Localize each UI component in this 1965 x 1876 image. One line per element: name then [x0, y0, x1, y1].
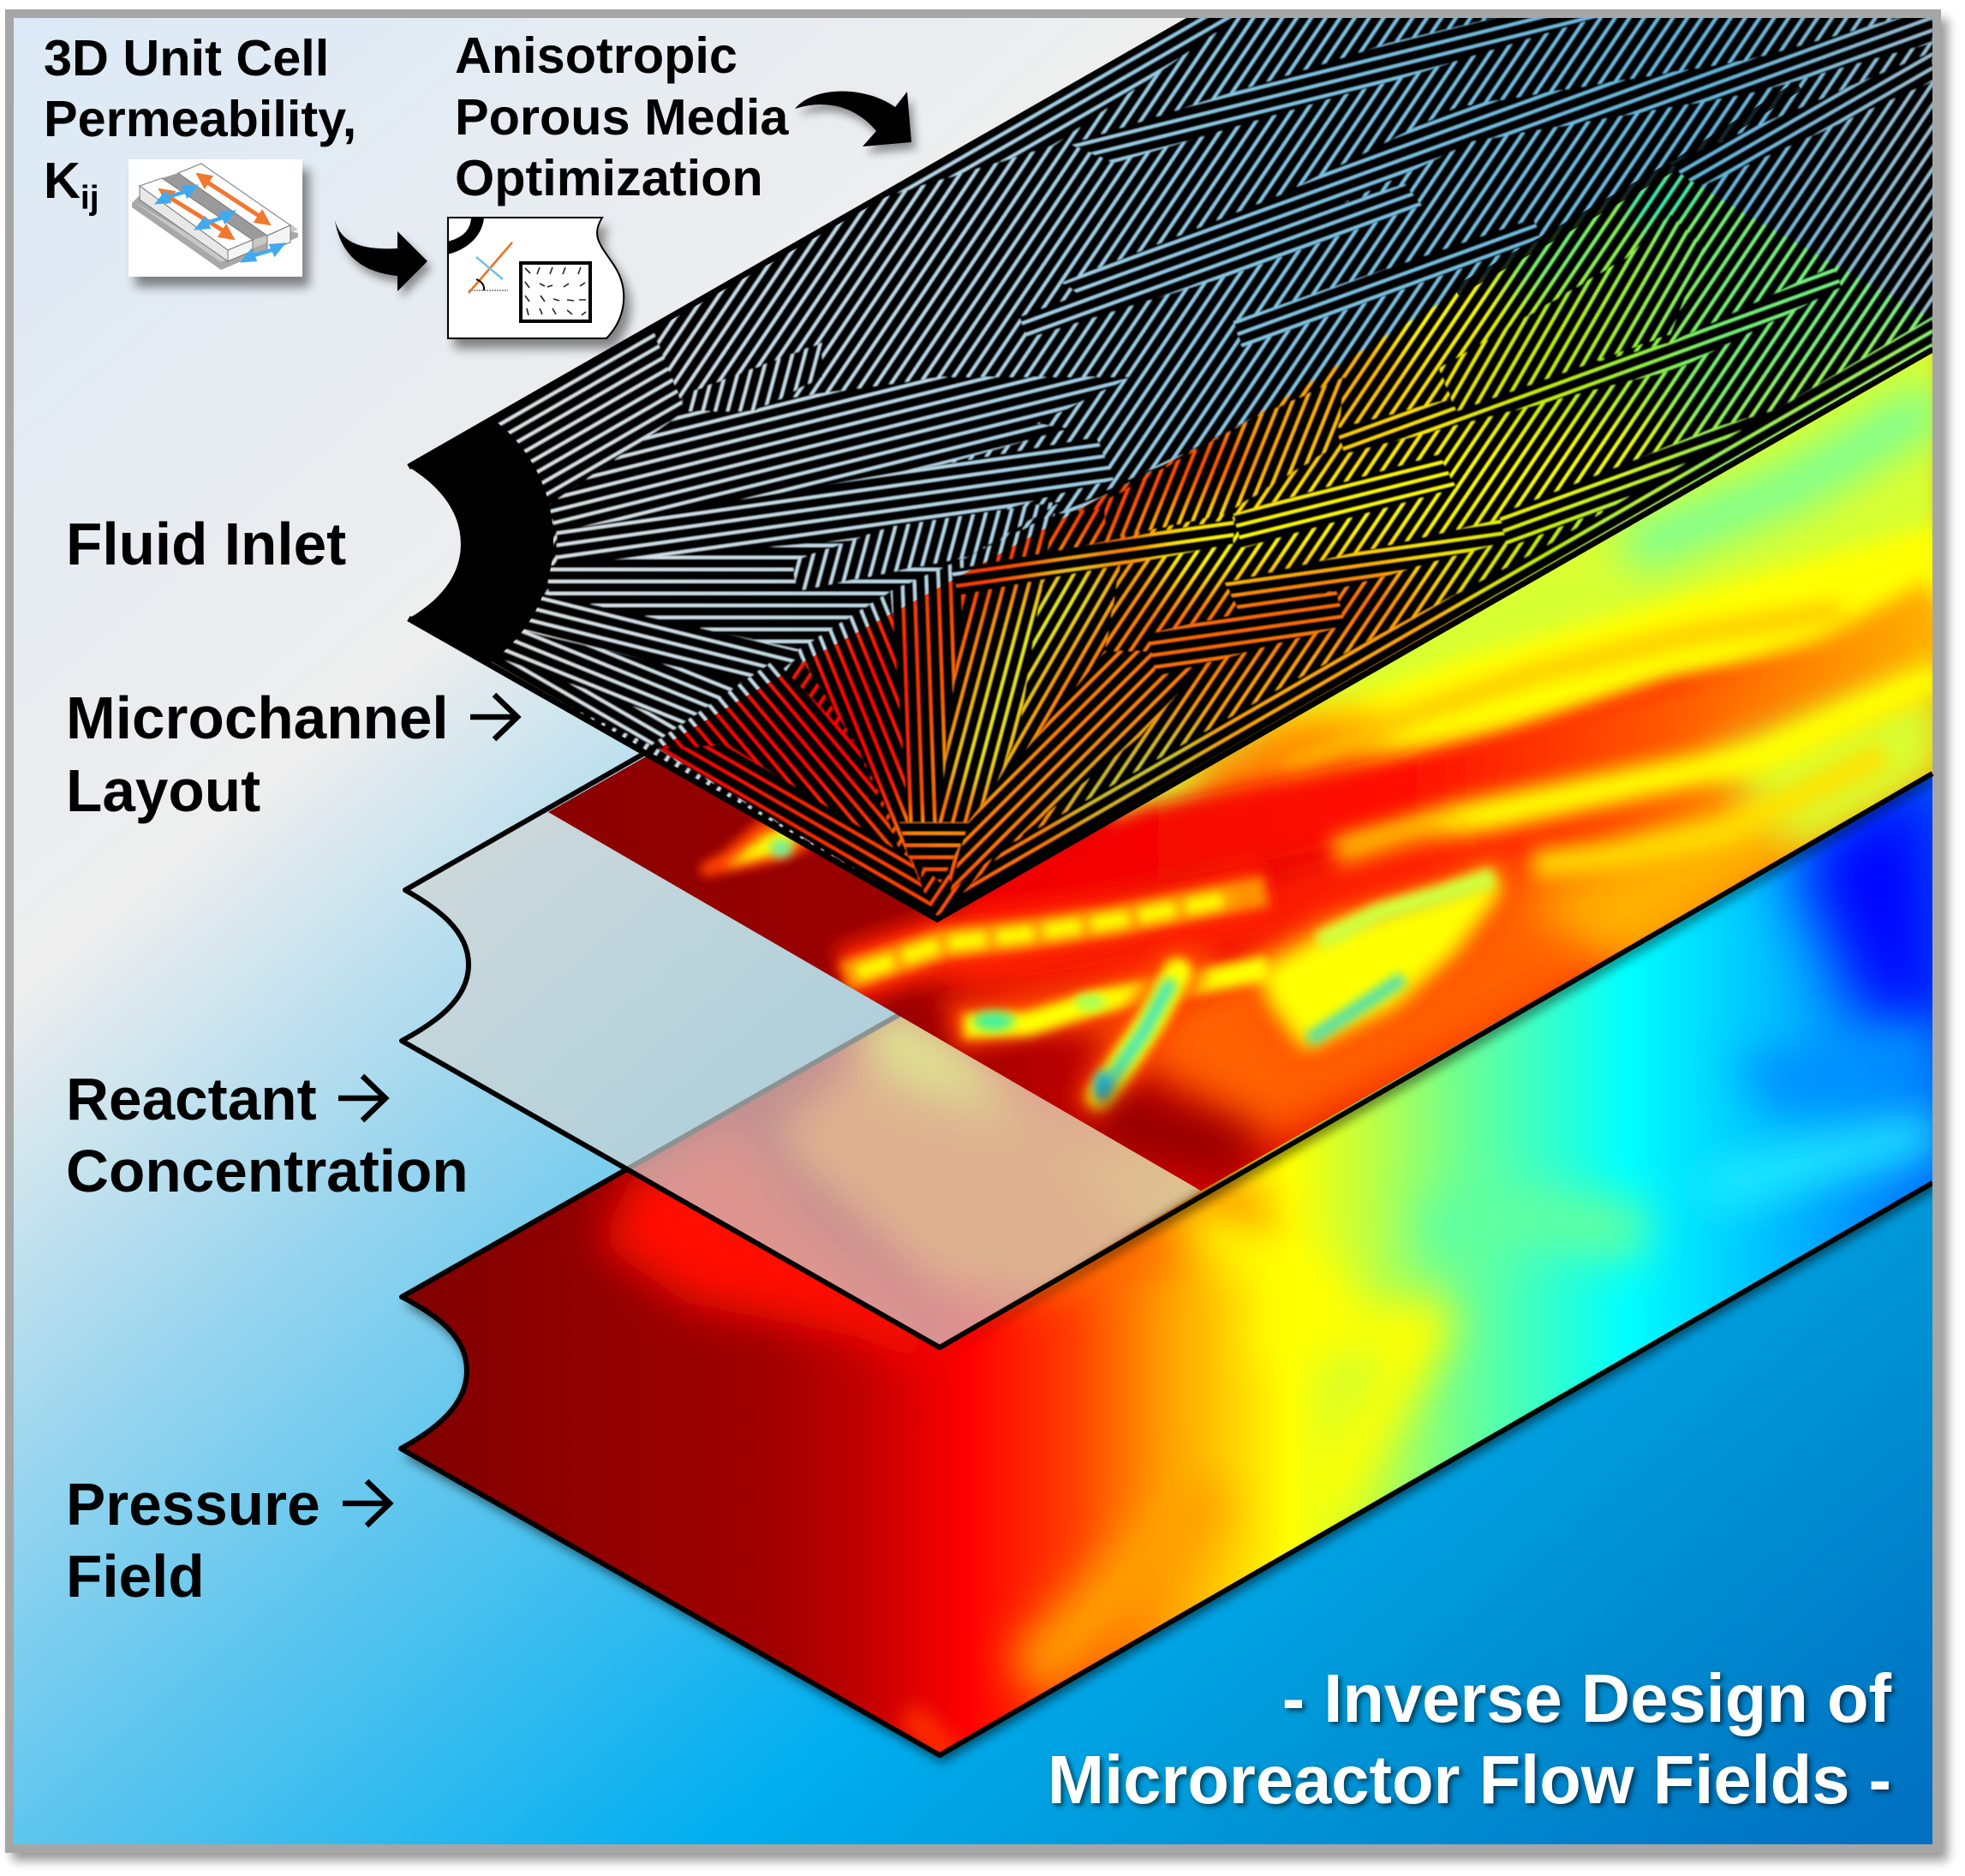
label: 3D unit cell permeability [44, 29, 356, 217]
label: microchannel layout with arrow [66, 684, 517, 824]
layer: reactant concentration, colour field [548, 353, 1932, 1345]
inset: porous media optimization panel [447, 217, 630, 349]
label: 3D unit cell permeability: K [44, 152, 81, 209]
label: 3D unit cell permeability: Permeability, [44, 90, 356, 147]
icon: orange permeability arrows [162, 176, 267, 237]
layer: microchannel layout [403, 18, 1936, 926]
layer: reactant concentration outline [402, 750, 1932, 1347]
layer: pressure field [398, 776, 1932, 1768]
title: inverse design of microreactor flow fields: Microreactor Flow Fields - [1048, 1742, 1891, 1818]
title: inverse design of microreactor flow fields [1048, 1660, 1892, 1818]
label: reactant concentration with arrow [66, 1066, 469, 1204]
heading: fluid inlet: Fluid Inlet [66, 511, 346, 577]
label: 3D unit cell permeability: ij [81, 180, 99, 217]
label: reactant concentration with arrow: Concentration [66, 1138, 469, 1204]
label: pressure field with arrow [66, 1471, 390, 1610]
icon: blue permeability arrows [158, 187, 282, 260]
label: anisotropic porous media optimization: Anisotropic [455, 27, 738, 84]
arrow: unit cell to optimization [335, 220, 427, 291]
label: anisotropic porous media optimization: Porous Media [455, 88, 789, 146]
unit cell orientation grid [521, 263, 590, 321]
label: anisotropic porous media optimization [455, 27, 789, 206]
title: inverse design of microreactor flow fields: - Inverse Design of [1282, 1660, 1892, 1736]
inset: unit cell card [128, 159, 309, 287]
layer: reactant concentration, transparent region [402, 812, 1201, 1347]
label: pressure field with arrow: Pressure [66, 1471, 320, 1538]
fluid inlet black band [409, 419, 553, 664]
label: anisotropic porous media optimization: Optimization [455, 149, 763, 206]
label: pressure field with arrow: Field [66, 1543, 205, 1610]
label: microchannel layout with arrow: Microchannel [66, 684, 449, 751]
label: microchannel layout with arrow: Layout [66, 757, 260, 824]
label: reactant concentration with arrow: Reactant [66, 1066, 317, 1132]
arrow: optimization to microchannel layer [795, 91, 911, 146]
label: 3D unit cell permeability: 3D Unit Cell [44, 29, 329, 87]
